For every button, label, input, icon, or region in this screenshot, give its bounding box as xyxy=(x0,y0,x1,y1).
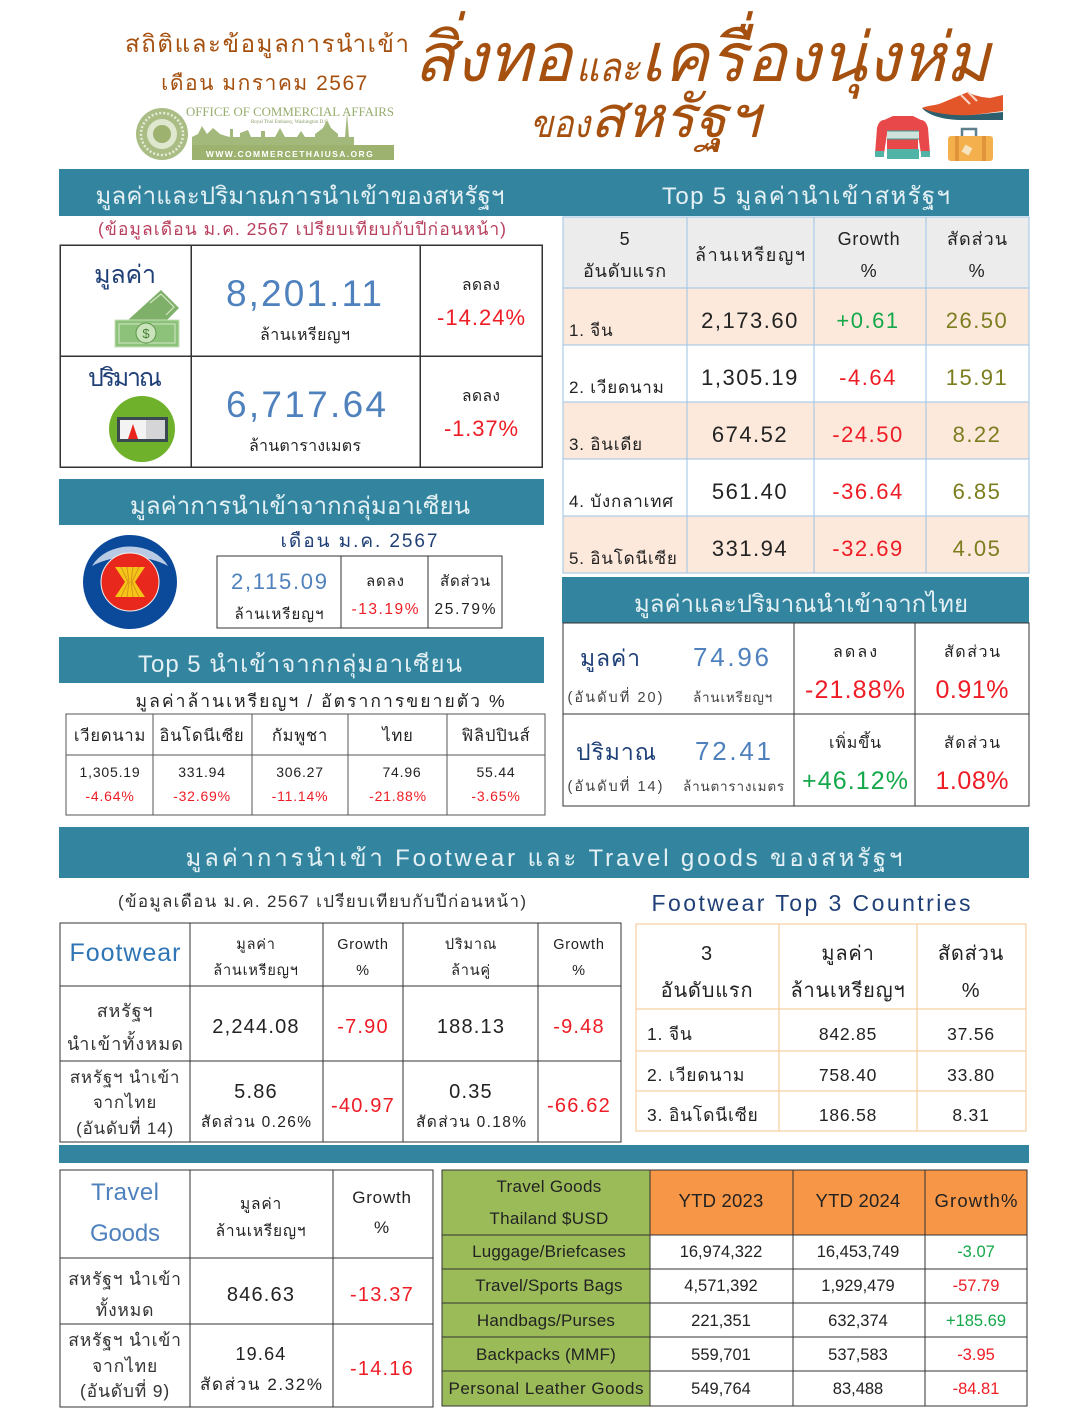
panel: top 5 import table: % xyxy=(969,261,985,281)
panel: ASEAN top 5 table: เวียดนาม xyxy=(74,727,146,745)
panel: travel goods table: มูลค่า xyxy=(240,1196,282,1214)
panel: top 5 import table: 4. บังกลาเทศ xyxy=(569,492,674,511)
icon: gauge xyxy=(109,396,175,462)
panel: footwear top 3 table: ล้านเหรียญฯ xyxy=(790,980,906,1002)
panel: footwear table: -66.62 xyxy=(547,1095,611,1117)
panel: travel goods Thailand table: Handbags/Purses xyxy=(477,1311,615,1330)
panel: ASEAN table: 25.79% xyxy=(434,601,496,618)
panel: value and volume table: ปริมาณ xyxy=(88,364,162,392)
panel: travel goods table: สัดส่วน 2.32% xyxy=(200,1375,322,1394)
logo: office of commercial affairs: OFFICE OF COMMERCIAL AFFAIRS xyxy=(186,104,394,119)
panel: travel goods table xyxy=(60,1170,433,1407)
main title: ของ xyxy=(530,104,592,146)
panel: footwear top 3 table: 186.58 xyxy=(819,1105,877,1125)
panel: footwear table: -7.90 xyxy=(337,1016,389,1038)
panel: ASEAN top 5 table: อินโดนีเซีย xyxy=(159,726,244,745)
panel: ASEAN table: ล้านเหรียญฯ xyxy=(234,606,324,623)
panel: footwear top 3 table: มูลค่า xyxy=(821,943,875,966)
panel: ASEAN top 5 table: กัมพูชา xyxy=(272,727,328,746)
panel: footwear table: มูลค่า xyxy=(236,937,276,953)
panel: imports from Thailand table: +46.12% xyxy=(802,767,908,795)
panel: footwear table: ปริมาณ xyxy=(445,937,497,953)
icon: suitcase xyxy=(948,129,993,161)
panel: ASEAN top 5 table: -21.88% xyxy=(369,788,427,804)
panel: footwear table: 2,244.08 xyxy=(212,1016,300,1038)
panel: travel goods Thailand table: Growth% xyxy=(934,1190,1018,1211)
panel: value and volume table: -14.24% xyxy=(437,305,525,330)
panel: top 5 import table: 5. อินโดนีเซีย xyxy=(569,548,678,568)
panel: travel goods table: สหรัฐฯ นำเข้า xyxy=(68,1330,182,1351)
panel: travel goods Thailand table: 632,374 xyxy=(828,1312,888,1330)
panel: ASEAN top 5 table: -11.14% xyxy=(272,788,328,804)
panel: top 5 import table xyxy=(563,217,1029,573)
panel: travel goods Thailand table: 16,453,749 xyxy=(817,1243,899,1261)
panel: top 5 import table: สัดส่วน xyxy=(947,229,1007,249)
panel: ASEAN top 5 table: -3.65% xyxy=(471,788,521,804)
panel: top 5 import table: 331.94 xyxy=(712,536,788,561)
panel: top 5 import table: 15.91 xyxy=(946,365,1008,390)
panel: travel goods Thailand table: 4,571,392 xyxy=(684,1277,758,1295)
panel: footwear top 3 table: 758.40 xyxy=(819,1065,877,1085)
panel: value and volume table: มูลค่า xyxy=(94,261,156,290)
panel: travel goods Thailand table: Backpacks (MMF) xyxy=(476,1345,616,1364)
panel: footwear top 3 table: 1. จีน xyxy=(647,1024,693,1044)
panel: imports from Thailand table: สัดส่วน xyxy=(944,735,1000,752)
panel: travel goods table: 846.63 xyxy=(227,1284,295,1306)
panel: footwear table: -9.48 xyxy=(553,1016,605,1038)
panel: ASEAN top 5 table: 306.27 xyxy=(276,764,324,780)
panel: ASEAN top 5 table: -32.69% xyxy=(173,788,231,804)
panel: top 5 import table: 2. เวียดนาม xyxy=(569,378,665,397)
panel: footwear top 3 table: 3. อินโดนีเซีย xyxy=(647,1105,759,1125)
panel: imports from Thailand table: สัดส่วน xyxy=(944,644,1000,661)
panel: footwear table: จากไทย xyxy=(93,1092,157,1112)
panel: top 5 import table: 2,173.60 xyxy=(701,308,799,333)
header: subtitle and month: เดือน มกราคม 2567 xyxy=(161,72,369,95)
icon: sneaker xyxy=(922,92,1003,120)
note: data period: (ข้อมูลเดือน ม.ค. 2567 เปรียบเทียบกับปีก่อนหน้า) xyxy=(98,219,506,240)
panel: ASEAN top 5 table: 55.44 xyxy=(476,764,516,780)
panel: ASEAN top 5 table: -4.64% xyxy=(85,788,135,804)
panel: value and volume table: ล้านเหรียญฯ xyxy=(260,326,350,344)
panel: ASEAN top 5 table: 331.94 xyxy=(178,764,226,780)
panel: travel goods Thailand table: 537,583 xyxy=(828,1346,888,1364)
panel: top 5 import table: 5 xyxy=(620,229,630,249)
panel: footwear top 3 table: สัดส่วน xyxy=(938,943,1004,965)
panel: ASEAN top 5 table: ไทย xyxy=(380,726,414,745)
panel: top 5 import table: -32.69 xyxy=(832,536,904,561)
panel: ASEAN top 5 table: 74.96 xyxy=(382,764,422,780)
divider bar xyxy=(59,1145,1029,1163)
panel: travel goods Thailand table xyxy=(442,1170,1027,1406)
logo: office of commercial affairs xyxy=(136,104,394,160)
panel: footwear top 3 table: 842.85 xyxy=(819,1024,877,1044)
panel: footwear table: % xyxy=(356,963,370,979)
panel: value and volume table: ล้านตารางเมตร xyxy=(249,437,361,455)
panel: top 5 import table: -4.64 xyxy=(839,365,897,390)
panel: footwear table: 188.13 xyxy=(437,1016,505,1038)
panel: travel goods Thailand table: -3.95 xyxy=(957,1346,995,1364)
panel: top 5 import table: 3. อินเดีย xyxy=(569,435,643,454)
note: data period: (ข้อมูลเดือน ม.ค. 2567 เปรียบเทียบกับปีก่อนหน้า) xyxy=(118,892,526,912)
panel: travel goods Thailand table: 549,764 xyxy=(691,1380,751,1398)
logo: office of commercial affairs: Royal Thai Embassy, Washington D.C. xyxy=(251,120,329,125)
panel heading: top 5 from ASEAN xyxy=(59,637,544,683)
panel: footwear table: ล้านคู่ xyxy=(451,962,491,979)
panel: value and volume table: ลดลง xyxy=(462,277,500,294)
panel heading: imports from ASEAN xyxy=(59,479,544,525)
panel heading: top 5 import value: Top 5 มูลค่านำเข้าสหรัฐฯ xyxy=(662,183,950,211)
main title: สหรัฐฯ xyxy=(590,85,765,153)
logo: office of commercial affairs: WWW.COMMERCETHAIUSA.ORG xyxy=(206,149,374,159)
panel: top 5 import table: 1,305.19 xyxy=(701,365,799,390)
main title: เครื่องนุ่งห่ม xyxy=(640,11,993,99)
panel heading: imports from Thailand: มูลค่าและปริมาณนำเข้าจากไทย xyxy=(634,590,968,619)
panel: footwear table: สหรัฐฯ xyxy=(97,1001,153,1022)
panel: top 5 import table: 6.85 xyxy=(953,479,1001,504)
panel: value and volume table: 6,717.64 xyxy=(226,384,386,425)
panel: travel goods table: จากไทย xyxy=(92,1356,158,1376)
panel: imports from Thailand table: -21.88% xyxy=(805,676,905,704)
panel: top 5 import table: +0.61 xyxy=(836,308,900,333)
panel: footwear table xyxy=(60,923,621,1142)
panel: footwear table: ล้านเหรียญฯ xyxy=(213,962,299,979)
panel: top 5 import table: 8.22 xyxy=(953,422,1001,447)
panel: footwear top 3 table: 3 xyxy=(701,943,713,965)
panel: travel goods Thailand table: Thailand $USD xyxy=(489,1209,609,1228)
panel: ASEAN table xyxy=(217,556,502,628)
panel: travel goods table: สหรัฐฯ นำเข้า xyxy=(68,1269,182,1290)
panel: imports from Thailand table xyxy=(563,623,1029,806)
panel: ASEAN table: ลดลง xyxy=(366,573,404,590)
panel heading: footwear and travel goods xyxy=(59,827,1029,878)
panel: footwear top 3 table: % xyxy=(962,980,980,1002)
panel: imports from Thailand table: เพิ่มขึ้น xyxy=(829,731,881,752)
panel: travel goods Thailand table: -57.79 xyxy=(953,1277,999,1295)
panel: travel goods Thailand table: Personal Leather Goods xyxy=(448,1379,644,1398)
panel: travel goods Thailand table: -84.81 xyxy=(953,1380,999,1398)
panel: travel goods Thailand table: YTD 2023 xyxy=(679,1190,763,1211)
panel: travel goods Thailand table: 221,351 xyxy=(691,1312,751,1330)
panel: top 5 import table: Growth xyxy=(838,229,900,249)
panel: top 5 import table: 4.05 xyxy=(953,536,1001,561)
panel: travel goods Thailand table: +185.69 xyxy=(946,1312,1006,1330)
panel: imports from Thailand table: (อันดับที่ 20) xyxy=(568,687,662,706)
panel: travel goods Thailand table: 16,974,322 xyxy=(680,1243,762,1261)
panel: imports from Thailand table: 74.96 xyxy=(693,642,769,672)
main title xyxy=(414,11,993,153)
panel: top 5 import table: 674.52 xyxy=(712,422,788,447)
panel: travel goods table: (อันดับที่ 9) xyxy=(80,1379,170,1401)
panel: top 5 import table: -24.50 xyxy=(832,422,904,447)
panel: travel goods table: ทั้งหมด xyxy=(96,1297,154,1320)
icon: ASEAN emblem xyxy=(83,535,177,629)
panel: value and volume table xyxy=(60,245,542,467)
icon: money: $ xyxy=(142,326,150,341)
panel: imports from Thailand table: ปริมาณ xyxy=(576,739,656,765)
panel: travel goods Thailand table: Travel/Sports Bags xyxy=(475,1276,623,1295)
panel: travel goods Thailand table: YTD 2024 xyxy=(816,1190,900,1211)
panel: footwear table: -40.97 xyxy=(331,1095,395,1117)
panel: value and volume table: ลดลง xyxy=(462,388,500,405)
panel: imports from Thailand table: 72.41 xyxy=(695,736,771,766)
panel: top 5 import table: ล้านเหรียญฯ xyxy=(695,245,805,265)
panel: travel goods Thailand table: 559,701 xyxy=(691,1346,751,1364)
panel: footwear top 3 table xyxy=(636,924,1026,1131)
panel: imports from Thailand table: ล้านเหรียญฯ xyxy=(693,690,773,705)
panel: ASEAN top 5 table: ฟิลิปปินส์ xyxy=(461,726,530,745)
panel: ASEAN table: 2,115.09 xyxy=(231,569,327,594)
panel: travel goods Thailand table: Travel Goods xyxy=(496,1177,602,1196)
panel: travel goods Thailand table: -3.07 xyxy=(957,1243,995,1261)
panel heading: import value and volume: มูลค่าและปริมาณการนำเข้าของสหรัฐฯ xyxy=(96,183,504,211)
panel: imports from Thailand table: มูลค่า xyxy=(580,645,640,672)
panel: footwear top 3 table: 33.80 xyxy=(947,1065,995,1085)
panel: footwear top 3 table: อันดับแรก xyxy=(661,980,753,1002)
panel heading: top 5 from ASEAN: Top 5 นำเข้าจากกลุ่มอาเซียน xyxy=(138,651,462,679)
panel: travel goods table: 19.64 xyxy=(235,1344,287,1364)
panel: footwear top 3 table: 37.56 xyxy=(947,1024,995,1044)
panel: travel goods table: -13.37 xyxy=(350,1284,414,1306)
panel: footwear top 3 table: 8.31 xyxy=(952,1105,990,1125)
panel: travel goods table: ล้านเหรียญฯ xyxy=(216,1223,306,1240)
panel: ASEAN top 5 table: 1,305.19 xyxy=(80,764,140,780)
panel: top 5 import table: 561.40 xyxy=(712,479,788,504)
panel: imports from Thailand table: ล้านตารางเมตร xyxy=(683,779,785,794)
panel: travel goods table: Growth xyxy=(352,1188,412,1207)
panel: imports from Thailand table: 1.08% xyxy=(936,767,1008,795)
panel: footwear top 3 table: 2. เวียดนาม xyxy=(647,1065,745,1085)
main title: และ xyxy=(576,46,641,90)
panel: top 5 import table: 1. จีน xyxy=(569,321,613,340)
icon: sweater xyxy=(875,116,930,159)
panel: top 5 import table: -36.64 xyxy=(832,479,904,504)
panel: ASEAN table: สัดส่วน xyxy=(440,573,490,590)
panel: travel goods Thailand table: 1,929,479 xyxy=(821,1277,895,1295)
panel heading: top 5 import value xyxy=(544,169,1029,216)
panel: footwear table: Footwear xyxy=(70,939,180,967)
header: subtitle and month xyxy=(125,31,409,95)
panel: imports from Thailand table: ลดลง xyxy=(833,644,877,661)
panel: value and volume table: -1.37% xyxy=(444,416,518,441)
panel: ASEAN top 5 table xyxy=(66,714,545,815)
panel: travel goods table: Goods xyxy=(90,1220,160,1247)
heading: footwear top 3 countries: Footwear Top 3 Countries xyxy=(652,890,970,916)
panel: footwear table: สัดส่วน 0.18% xyxy=(416,1114,526,1131)
panel: value and volume table: 8,201.11 xyxy=(226,273,382,314)
panel heading: imports from Thailand xyxy=(562,577,1029,623)
panel: top 5 import table: 26.50 xyxy=(946,308,1008,333)
panel: footwear table: 0.35 xyxy=(449,1081,493,1103)
panel heading: footwear and travel goods: มูลค่าการนำเข้า Footwear และ Travel goods ของสหรัฐฯ xyxy=(186,845,902,873)
panel: footwear table: สหรัฐฯ นำเข้า xyxy=(70,1068,180,1088)
panel: imports from Thailand table: (อันดับที่ 14) xyxy=(568,776,662,795)
panel: imports from Thailand table: 0.91% xyxy=(936,676,1008,704)
panel: travel goods Thailand table: Luggage/Briefcases xyxy=(472,1242,626,1261)
header: subtitle and month: สถิติและข้อมูลการนำเข้า xyxy=(125,31,409,59)
panel: footwear table: (อันดับที่ 14) xyxy=(76,1116,174,1138)
panel: footwear table: สัดส่วน 0.26% xyxy=(201,1114,311,1131)
panel: footwear table: Growth xyxy=(553,937,605,953)
panel heading: imports from ASEAN: มูลค่าการนำเข้าจากกลุ่มอาเซียน xyxy=(130,493,470,521)
panel: footwear table: Growth xyxy=(337,937,389,953)
panel heading: import value and volume xyxy=(59,169,544,216)
panel: top 5 import table: อันดับแรก xyxy=(583,261,667,281)
panel: footwear table: นำเข้าทั้งหมด xyxy=(67,1031,183,1054)
note: value and growth: มูลค่าล้านเหรียญฯ / อัตราการขยายตัว % xyxy=(136,691,504,712)
main title: สิ่งทอ xyxy=(414,11,575,96)
panel: travel goods Thailand table: 83,488 xyxy=(833,1380,883,1398)
panel: travel goods table: % xyxy=(374,1218,390,1237)
panel: ASEAN table: -13.19% xyxy=(352,601,419,618)
label: January 2567: เดือน ม.ค. 2567 xyxy=(280,531,438,552)
icon: money xyxy=(115,290,179,347)
panel: travel goods table: -14.16 xyxy=(350,1358,414,1380)
panel: footwear table: % xyxy=(572,963,586,979)
panel: travel goods table: Travel xyxy=(91,1179,159,1206)
panel: footwear table: 5.86 xyxy=(234,1081,278,1103)
panel: top 5 import table: % xyxy=(861,261,877,281)
